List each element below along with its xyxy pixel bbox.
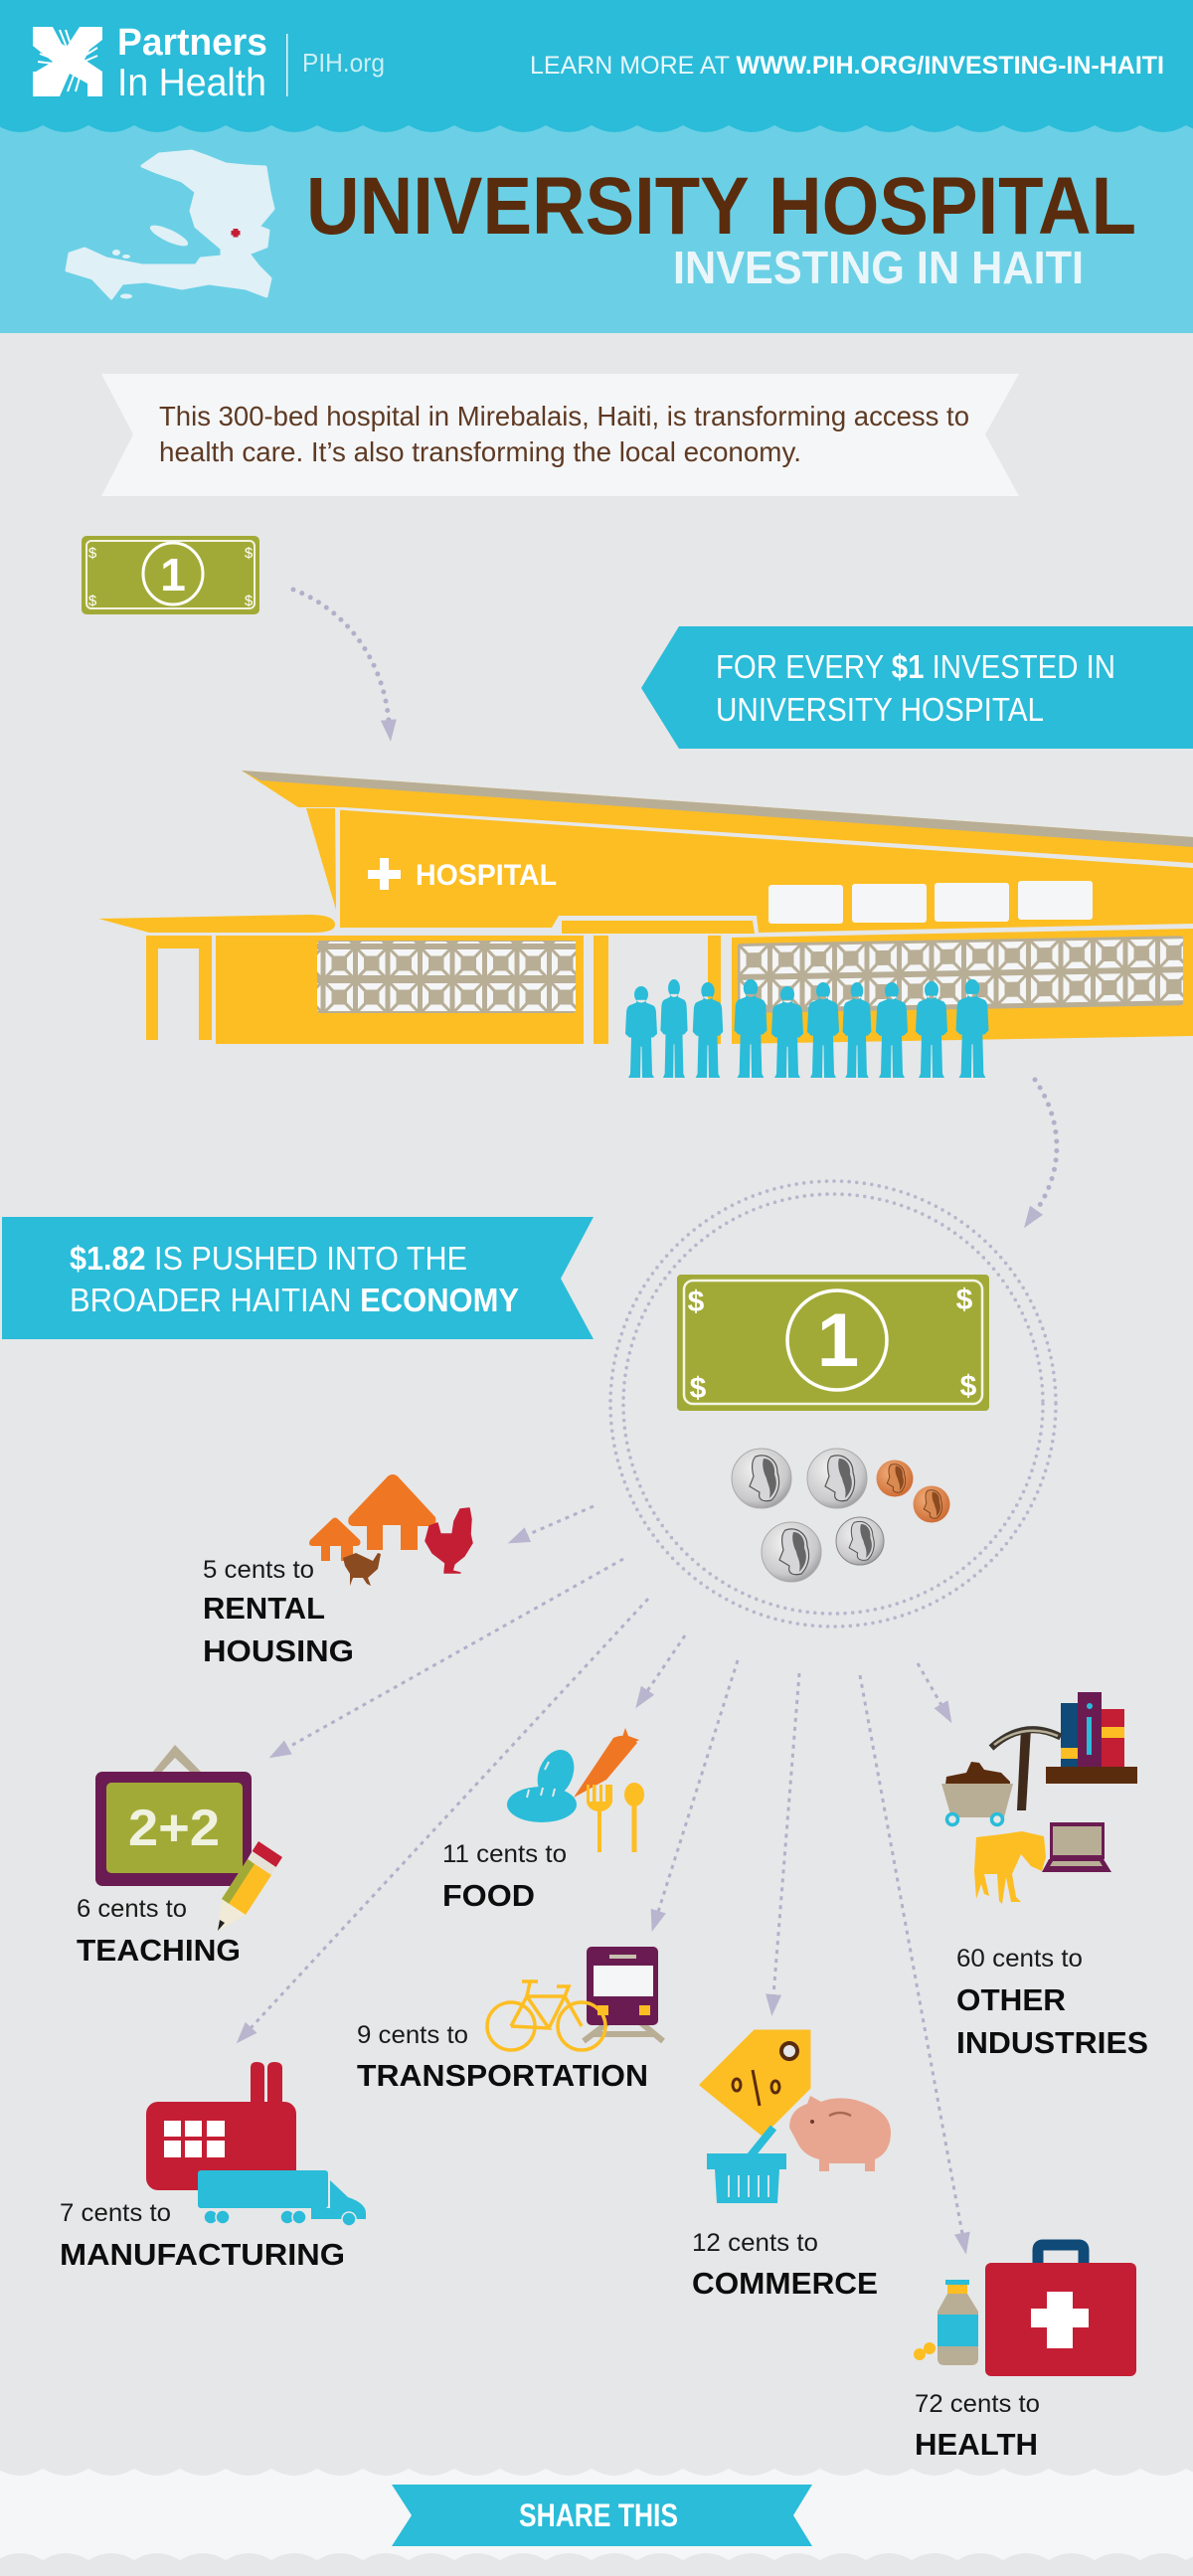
icon: red location marker xyxy=(231,229,241,237)
icon: small dollar bill xyxy=(82,536,259,614)
callout: for every $1 xyxy=(641,626,1193,749)
sector: rental housing: RENTAL xyxy=(203,1591,325,1626)
icon: large dollar bill xyxy=(677,1275,989,1411)
upper facade xyxy=(340,810,1193,933)
callout: $1.82: BROADER HAITIAN ECONOMY xyxy=(70,1282,519,1318)
icon: chalkboard and pencil xyxy=(95,1745,282,1931)
logo: Partners In Health xyxy=(33,22,288,104)
decorative grille right xyxy=(738,936,1183,1013)
title band xyxy=(0,125,1193,333)
sector: transportation: TRANSPORTATION xyxy=(357,2058,648,2093)
icon: large dollar bill: $ xyxy=(956,1284,973,1316)
callout: $1.82 xyxy=(2,1217,594,1339)
sector: commerce: 12 cents to xyxy=(692,2229,818,2257)
callout: $1.82: $1.82 IS PUSHED INTO THE xyxy=(70,1240,467,1277)
lower structures xyxy=(146,936,212,1040)
sector: other industries: INDUSTRIES xyxy=(956,2025,1148,2060)
icon: medical kit and medicine bottle xyxy=(914,2245,1136,2376)
sector: teaching: TEACHING xyxy=(77,1933,241,1968)
callout: for every $1: FOR EVERY $1 INVESTED IN xyxy=(716,648,1115,685)
sector: other industries: OTHER xyxy=(956,1982,1066,2017)
sector: health: HEALTH xyxy=(915,2427,1038,2462)
hospital sign: HOSPITAL xyxy=(416,859,557,892)
roof xyxy=(242,771,1193,863)
icon: large dollar bill: $ xyxy=(690,1372,707,1405)
icon: large dollar bill: $ xyxy=(688,1286,705,1318)
icon: small dollar bill: $ xyxy=(88,593,97,609)
PIH.org link: PIH.org xyxy=(302,48,385,78)
sector: teaching xyxy=(77,1745,282,1968)
sector: food: 11 cents to xyxy=(442,1840,567,1868)
learn more link: LEARN MORE AT WWW.PIH.ORG/INVESTING-IN-HAITI xyxy=(530,52,1164,80)
icon: train and bicycle xyxy=(487,1947,663,2050)
hospital building xyxy=(98,771,1193,1044)
footer band xyxy=(0,2469,1193,2560)
logo: Partners In Health: Partners xyxy=(117,22,267,64)
windows xyxy=(768,881,1093,924)
dotted circle xyxy=(610,1181,1056,1627)
sector: commerce xyxy=(692,2031,891,2301)
logo: Partners In Health: In Health xyxy=(117,62,266,104)
subtitle: INVESTING IN HAITI xyxy=(673,242,1084,293)
intro ribbon: health care. It’s also transforming the local economy. xyxy=(159,436,801,467)
icon: small dollar bill: 1 xyxy=(160,549,186,601)
sector: manufacturing: 7 cents to xyxy=(60,2199,171,2227)
header bar xyxy=(0,0,1193,133)
arrow: bill to hospital xyxy=(293,590,389,721)
sector: manufacturing: MANUFACTURING xyxy=(60,2237,345,2272)
sector: other industries xyxy=(941,1692,1148,2060)
share ribbon xyxy=(392,2485,812,2546)
sector: health xyxy=(914,2245,1136,2462)
callout: for every $1: UNIVERSITY HOSPITAL xyxy=(716,691,1044,728)
flow arrows to sectors xyxy=(251,1506,962,2234)
map of Haiti xyxy=(67,151,273,298)
icon: books, pickaxe, cart, donkey and laptop xyxy=(941,1692,1137,1904)
sector: other industries: 60 cents to xyxy=(956,1945,1083,1973)
icon: price tag, piggy bank and basket xyxy=(701,2031,891,2203)
icon: small dollar bill: $ xyxy=(245,545,254,562)
sector: food: FOOD xyxy=(442,1878,535,1913)
sector: rental housing: HOUSING xyxy=(203,1633,354,1668)
icon: small dollar bill: $ xyxy=(88,545,97,562)
sector: rental housing xyxy=(203,1474,472,1668)
staff silhouettes xyxy=(625,979,988,1078)
sector: commerce: COMMERCE xyxy=(692,2266,878,2301)
coins xyxy=(732,1449,950,1582)
sector: food xyxy=(442,1728,644,1913)
sector: teaching: 6 cents to xyxy=(77,1895,187,1923)
sector: rental housing: 5 cents to xyxy=(203,1556,314,1584)
decorative grille left xyxy=(317,941,576,1013)
icon: factory and truck xyxy=(146,2062,366,2226)
intro ribbon xyxy=(101,374,1019,496)
share ribbon: SHARE THIS xyxy=(519,2497,678,2533)
icon: large dollar bill: 1 xyxy=(817,1298,859,1383)
arrow: hospital to economy xyxy=(1035,1080,1057,1211)
icon: large dollar bill: $ xyxy=(960,1370,977,1403)
icon: chalkboard and pencil: 2+2 xyxy=(128,1800,220,1857)
sector: health: 72 cents to xyxy=(915,2390,1040,2418)
sector: manufacturing xyxy=(60,2062,366,2272)
sector: transportation: 9 cents to xyxy=(357,2021,468,2049)
hospital sign xyxy=(368,858,557,892)
sector: transportation xyxy=(357,1947,663,2093)
icon: small dollar bill: $ xyxy=(245,593,254,609)
icon: bread, carrot and cutlery xyxy=(507,1728,644,1852)
icon: houses and poultry xyxy=(309,1474,472,1586)
intro ribbon: This 300-bed hospital in Mirebalais, Haiti, is transforming access to xyxy=(159,401,969,431)
